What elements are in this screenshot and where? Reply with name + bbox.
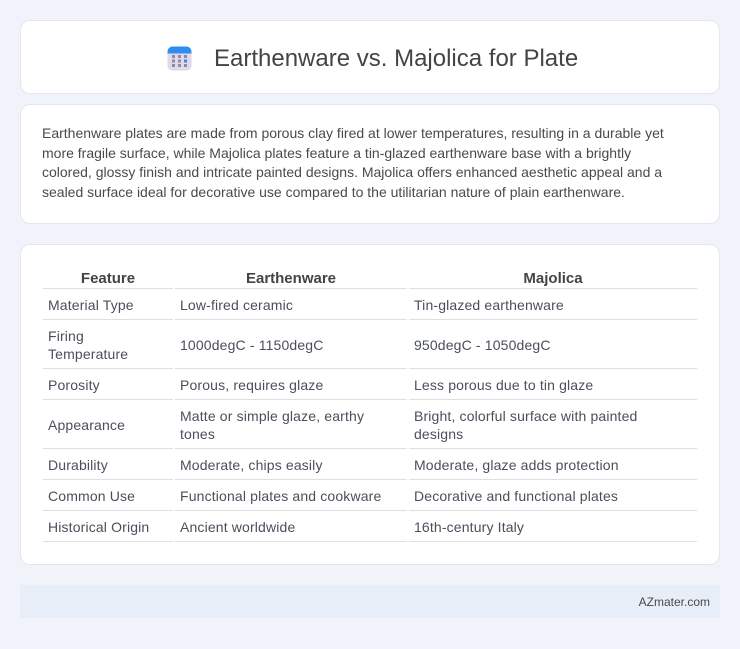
summary text: sealed surface ideal for decorative use compared to the utilitarian nature of plain earthenware. xyxy=(42,184,625,200)
row: Durability: Durability xyxy=(48,457,108,473)
row: Common Use xyxy=(48,488,618,504)
row: Porosity: Porous, requires glaze xyxy=(180,377,323,393)
header: Majolica: Majolica xyxy=(523,270,583,287)
row: Appearance: designs xyxy=(414,426,463,442)
header: Feature: Feature xyxy=(81,270,135,287)
row: Historical Origin: Historical Origin xyxy=(48,519,149,535)
row: Historical Origin xyxy=(48,519,524,535)
summary text: Earthenware plates are made from porous clay fired at lower temperatures, resulting in a durable yet xyxy=(42,125,664,141)
row: Firing Temperature: 1000degC - 1150degC xyxy=(180,337,323,353)
row: Material Type: Material Type xyxy=(48,297,134,313)
row: Firing Temperature: Firing xyxy=(48,328,84,344)
row: Durability xyxy=(48,457,619,473)
row: Durability: Moderate, glaze adds protection xyxy=(414,457,619,473)
row: Common Use: Functional plates and cookware xyxy=(180,488,381,504)
row: Material Type: Tin-glazed earthenware xyxy=(414,297,564,313)
row: Appearance: Matte or simple glaze, earthy xyxy=(180,408,364,424)
row: Historical Origin: 16th-century Italy xyxy=(414,519,524,535)
summary text: more fragile surface, while Majolica plates feature a tin-glazed earthenware base with a brightly xyxy=(42,145,631,161)
row: Firing Temperature: 950degC - 1050degC xyxy=(414,337,551,353)
summary text xyxy=(42,125,664,200)
row: Common Use: Common Use xyxy=(48,488,135,504)
panel: comparison table xyxy=(20,244,720,565)
icon: calendar xyxy=(168,46,192,70)
row: Firing Temperature xyxy=(48,328,551,362)
row: Durability: Moderate, chips easily xyxy=(180,457,323,473)
row: Material Type: Low-fired ceramic xyxy=(180,297,293,313)
footer text: AZmater.com xyxy=(639,595,710,609)
row: Firing Temperature: Temperature xyxy=(48,346,128,362)
row: Appearance xyxy=(48,408,637,442)
panel: title card xyxy=(20,20,720,94)
summary text: colored, glossy finish and intricate painted designs. Majolica offers enhanced aesthetic appeal and a xyxy=(42,164,662,180)
row: Porosity: Less porous due to tin glaze xyxy=(414,377,593,393)
panel: summary xyxy=(20,104,720,224)
row: Material Type xyxy=(48,297,564,313)
row: Appearance: Appearance xyxy=(48,417,125,433)
header: Earthenware: Earthenware xyxy=(246,270,336,287)
row: Porosity: Porosity xyxy=(48,377,100,393)
title: Earthenware vs. Majolica for Plate xyxy=(214,45,578,72)
row: Appearance: tones xyxy=(180,426,215,442)
row: Historical Origin: Ancient worldwide xyxy=(180,519,295,535)
footer bar xyxy=(20,585,720,618)
row: Common Use: Decorative and functional plates xyxy=(414,488,618,504)
row: Appearance: Bright, colorful surface with painted xyxy=(414,408,637,424)
row: Porosity xyxy=(48,377,593,393)
